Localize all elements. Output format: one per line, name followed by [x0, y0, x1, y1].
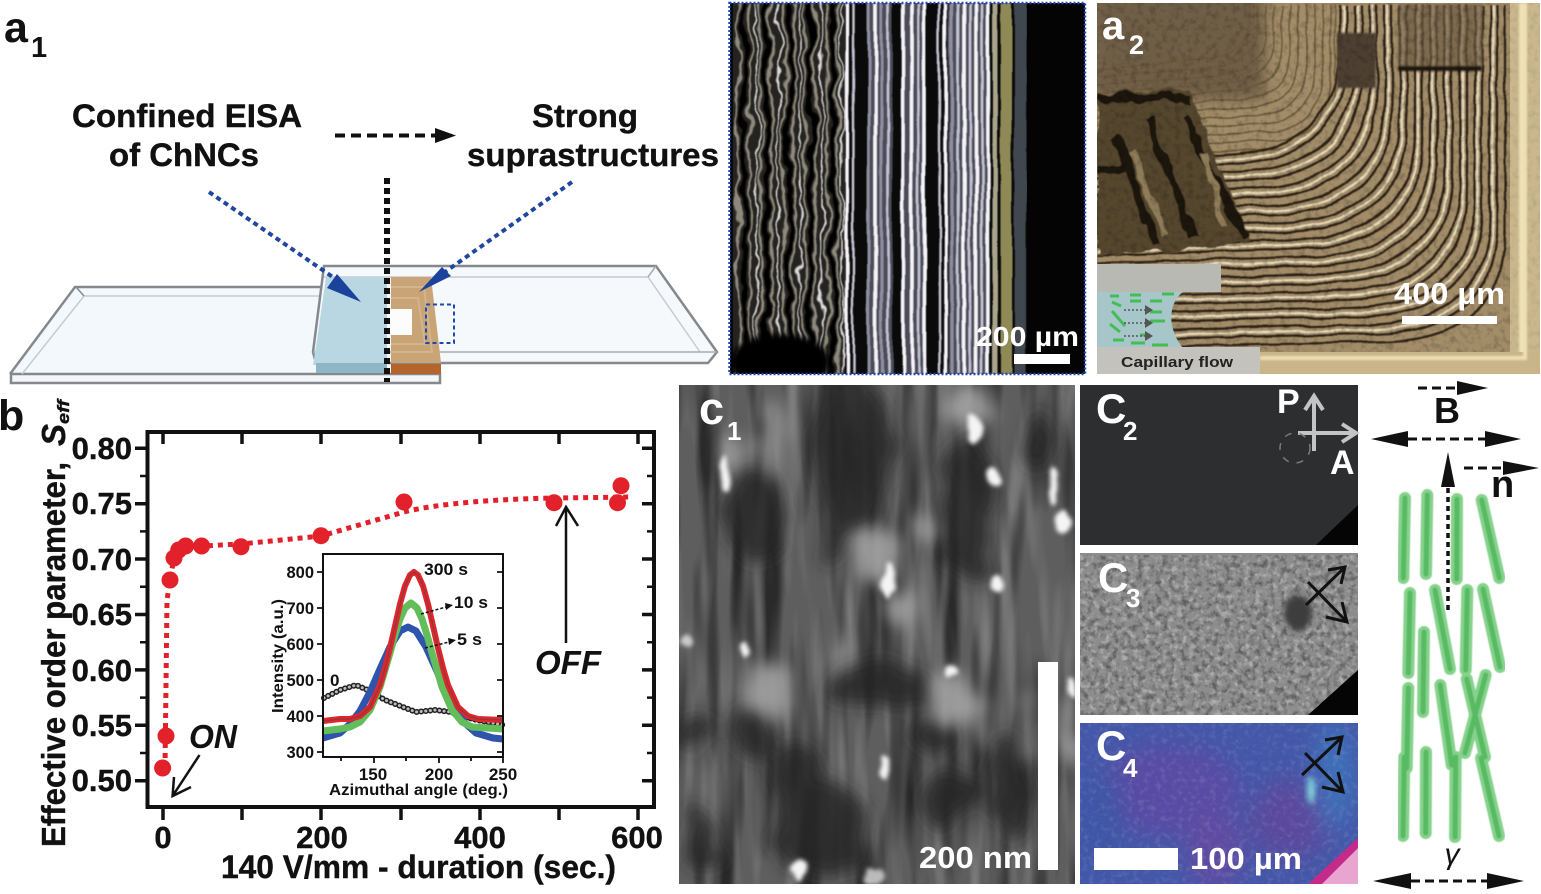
y axis title: Effective order parameter, [35, 462, 72, 847]
panel: c1 electron micrograph [674, 362, 1077, 884]
capillary flow inset: Capillary flow [1121, 355, 1234, 371]
y tick labels: 0.60 [72, 653, 132, 688]
label a1: a [4, 4, 29, 52]
series labels: 0 [330, 671, 339, 690]
annotation ON: ON [189, 718, 238, 755]
label c4: 4 [1123, 753, 1138, 783]
double arrow bottom [1373, 873, 1524, 889]
annotation ON [173, 718, 238, 796]
y tick labels: 0.55 [72, 708, 132, 743]
brown suprastructure region [391, 277, 441, 374]
panel: nanocrystal alignment schematic [1371, 381, 1539, 889]
arrow and label B [1418, 381, 1488, 431]
heading: confined EISA of ChNCs [72, 98, 302, 173]
inset x tick labels: 250 [489, 765, 517, 784]
y tick labels: 0.50 [72, 763, 132, 798]
y axis title: S [35, 424, 72, 446]
scale bar [1038, 662, 1058, 870]
heading: confined EISA of ChNCs: Confined EISA [72, 98, 302, 134]
flow arrows [1124, 305, 1153, 341]
scale bar [1014, 354, 1070, 364]
label c1 [699, 383, 741, 446]
scale label 200 nm: 200 nm [919, 840, 1032, 875]
y tick labels: 0.70 [72, 542, 132, 577]
inset y tick labels: 400 [286, 708, 314, 726]
arrow: to confined region [209, 192, 361, 302]
capillary flow inset [1097, 264, 1260, 374]
arrow and label B: B [1434, 390, 1460, 431]
panel: dark-field micrograph [730, 0, 1087, 390]
label c3: 3 [1126, 583, 1140, 613]
arrow: to suprastructures [419, 182, 572, 292]
inset y tick labels: 600 [286, 636, 314, 654]
scale bar [1402, 316, 1497, 324]
panel: c2 crossed polarisers [1080, 383, 1358, 545]
y tick labels: 0.75 [72, 486, 132, 521]
curve: 300 s [323, 572, 503, 721]
scale label 200 µm: 200 µm [976, 321, 1079, 352]
heading: confined EISA of ChNCs: of ChNCs [109, 137, 259, 173]
inset y tick labels [286, 564, 314, 762]
x tick labels: 400 [454, 820, 506, 855]
arrow and label n [1464, 461, 1539, 506]
inset y tick labels: 500 [286, 672, 314, 690]
central opening [388, 309, 412, 335]
series pointer arrows [421, 603, 456, 648]
dotted divider line [384, 178, 390, 382]
curve: 0 s [324, 685, 503, 725]
left glass slide [10, 287, 440, 383]
label c1: 1 [727, 416, 741, 446]
heading: strong suprastructures: suprastructures [467, 137, 719, 173]
label c2 [1096, 385, 1137, 446]
inset y tick labels: 300 [286, 744, 314, 762]
vertical director arrow [1441, 452, 1455, 610]
label c2: 2 [1123, 416, 1137, 446]
green rods in flow [1110, 294, 1174, 345]
series labels: 5 s [457, 630, 482, 649]
inset axis titles: Intensity (a.u.) [270, 599, 287, 713]
curve: 10 s [323, 603, 503, 731]
inset axis titles: Azimuthal angle (deg.) [329, 782, 508, 799]
label c3: C [1098, 554, 1128, 601]
label c4: C [1096, 722, 1126, 769]
panel: c3 polarised grey [1080, 553, 1358, 715]
x tick labels [154, 820, 663, 855]
panel: c4 polarised colour [1078, 720, 1358, 890]
scale bar [1094, 848, 1178, 870]
inset x tick labels: 150 [359, 765, 387, 784]
panel: a1 slide schematic [4, 4, 719, 383]
polariser arrows P and A: A [1330, 444, 1355, 482]
scale label 400 µm: 400 µm [1394, 276, 1505, 311]
arrow and label n: n [1491, 464, 1514, 506]
heading: strong suprastructures: Strong [532, 98, 638, 134]
crossed arrows [1302, 737, 1343, 792]
dotted fit line [165, 497, 633, 768]
label c3 [1098, 554, 1140, 613]
label a1: 1 [31, 32, 47, 64]
inset frame and ticks [317, 554, 503, 763]
polariser arrows P and A: P [1277, 383, 1300, 421]
label c2: C [1096, 385, 1126, 432]
label a2: a [1102, 4, 1125, 48]
panel: a2 capillary micrograph [1090, 0, 1541, 374]
double arrow top [1371, 431, 1521, 447]
dashed box: magnified zone [426, 304, 454, 343]
label gamma: γ [1444, 838, 1462, 871]
y axis title: eff [54, 397, 73, 424]
inset axis titles [270, 599, 508, 799]
inset y tick labels: 800 [286, 564, 314, 582]
curve: 5 s [323, 627, 503, 739]
arrow: process direction [335, 128, 456, 143]
series labels: 10 s [454, 593, 488, 612]
x tick labels: 0 [154, 820, 172, 855]
label a2: 2 [1129, 30, 1144, 60]
polariser arrows P and A [1277, 383, 1356, 482]
x tick labels: 200 [296, 820, 348, 855]
panel: b order parameter chart [0, 392, 663, 885]
label a1 [4, 4, 47, 64]
x axis title: 140 V/mm - duration (sec.) [221, 849, 616, 885]
heading: strong suprastructures [467, 98, 719, 173]
inset: azimuthal intensity chart [270, 554, 517, 799]
y tick labels [72, 431, 132, 798]
chart frame and ticks [135, 432, 654, 820]
y tick labels: 0.65 [72, 597, 132, 632]
data points [154, 477, 630, 776]
crossed arrows [1306, 567, 1347, 622]
series labels: 300 s [424, 560, 468, 579]
scale label 100 µm: 100 µm [1190, 841, 1302, 876]
series labels [330, 560, 488, 690]
x tick labels: 600 [611, 820, 663, 855]
annotation OFF: OFF [535, 644, 602, 681]
label c4 [1096, 722, 1138, 783]
inset x tick labels [359, 765, 517, 784]
label a2 [1102, 4, 1144, 60]
y tick labels: 0.80 [72, 431, 132, 466]
annotation OFF [535, 507, 602, 681]
inset y tick labels: 700 [286, 600, 314, 618]
blue confined region [313, 277, 387, 373]
green nanocrystal rods [1403, 495, 1500, 837]
inset x tick labels: 200 [425, 765, 453, 784]
right glass slide [313, 266, 717, 363]
label c1: c [699, 383, 724, 434]
